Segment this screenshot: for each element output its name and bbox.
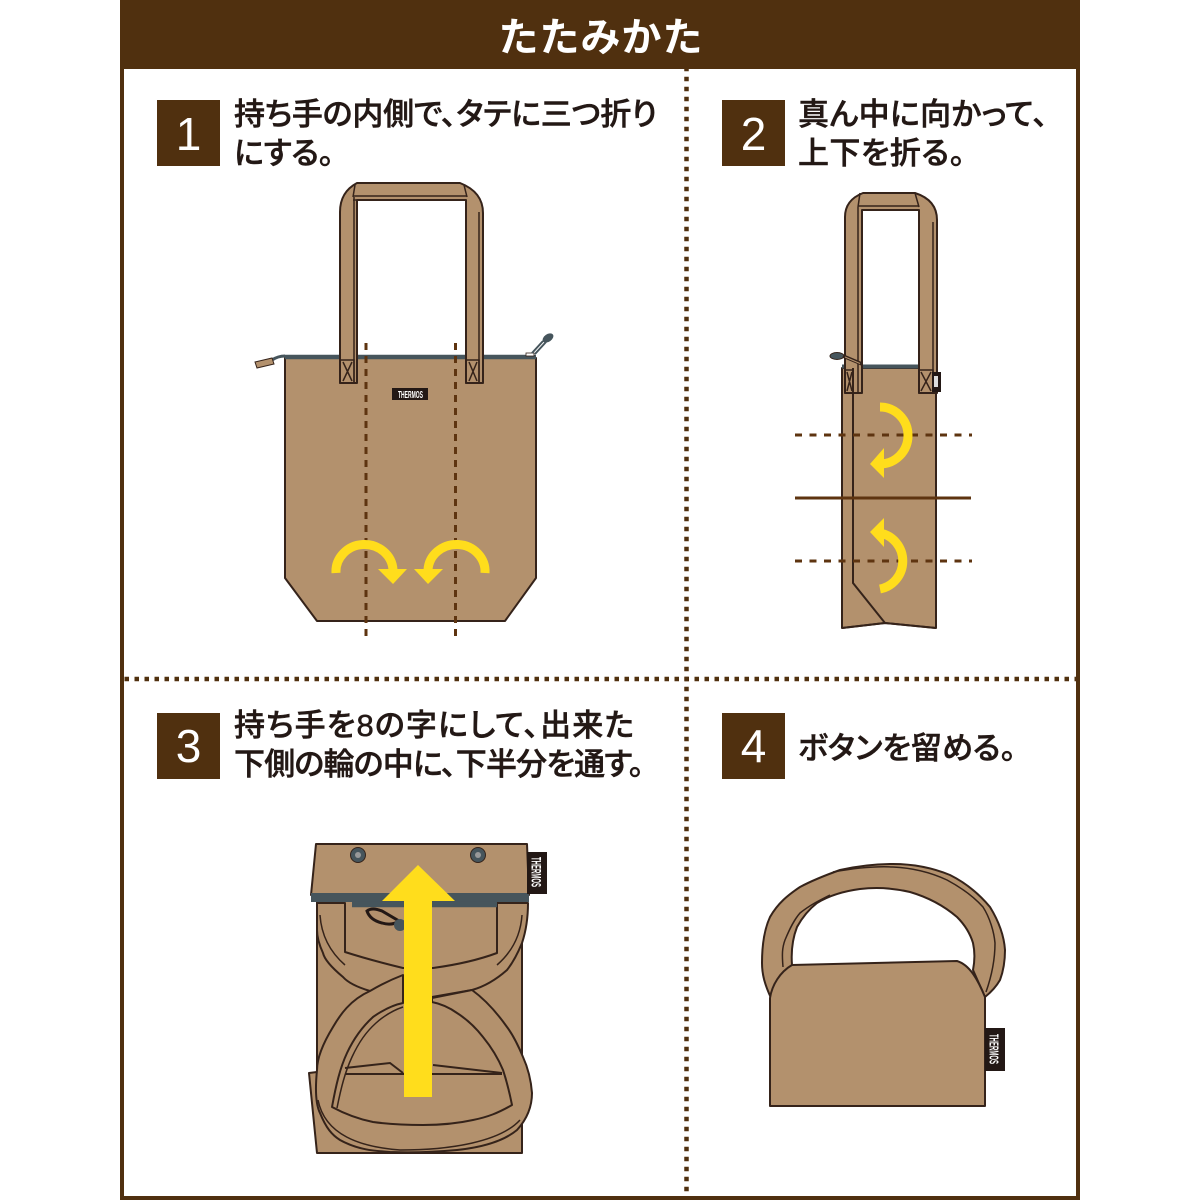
- step 2 text: 真ん中に向かって、: [798, 97, 1048, 132]
- panel: step 4: [722, 713, 1016, 1106]
- title: たたみかた: [498, 16, 704, 60]
- THERMOS tag: [527, 852, 547, 894]
- step 3 text: 下側の輪の中に、下半分を通す。: [234, 747, 644, 782]
- step 4 text: ボタンを留める。: [798, 731, 1016, 766]
- THERMOS tag: THERMOS: [528, 857, 544, 887]
- step 3 text: [234, 708, 644, 782]
- header band: [120, 0, 1080, 69]
- step 3 text: 持ち手を8の字にして、出来た: [234, 708, 634, 743]
- panel: step 1: [157, 97, 657, 640]
- step 4 bag illustration: [762, 864, 1005, 1106]
- step 1 text: にする。: [234, 136, 334, 171]
- fold arrows: [870, 407, 908, 589]
- step 1 bag illustration: [255, 183, 555, 621]
- THERMOS tag: THERMOS: [986, 1034, 1002, 1064]
- THERMOS tag: [985, 1028, 1005, 1071]
- lower loop strap: [316, 975, 532, 1152]
- step 1 number: 1: [176, 108, 201, 160]
- step 1 number: [157, 100, 220, 166]
- outer frame: [122, 2, 1078, 1198]
- step 4 number: 4: [741, 720, 766, 772]
- step 3 number: [157, 713, 220, 779]
- step 2 text: [798, 97, 1048, 171]
- top flap: [311, 844, 529, 895]
- side tag: [932, 372, 941, 392]
- step 2 text: 上下を折る。: [798, 136, 965, 171]
- step 3 bag illustration: [309, 844, 547, 1153]
- fold lines: [795, 435, 972, 561]
- THERMOS label: [392, 388, 428, 401]
- step 4 number: [722, 713, 785, 779]
- zipper: [311, 893, 529, 902]
- body: [309, 895, 522, 1153]
- zipper pull: [367, 909, 399, 924]
- step 2 number: [722, 100, 785, 166]
- step 3 number: 3: [176, 720, 201, 772]
- step 2 bag illustration: [830, 193, 941, 628]
- step 1 text: [234, 97, 657, 171]
- THERMOS label: THERMOS: [398, 390, 423, 401]
- snap buttons: [350, 848, 366, 862]
- fold arrows: [336, 544, 485, 584]
- panel: step 3: [157, 708, 644, 1153]
- fold lines: [366, 343, 456, 640]
- step 2 number: 2: [741, 108, 766, 160]
- upper crossing strap: [317, 903, 528, 997]
- step 1 text: 持ち手の内側で、タテに三つ折り: [234, 97, 657, 132]
- panel: step 2: [722, 97, 1048, 628]
- up arrow: [382, 865, 455, 1097]
